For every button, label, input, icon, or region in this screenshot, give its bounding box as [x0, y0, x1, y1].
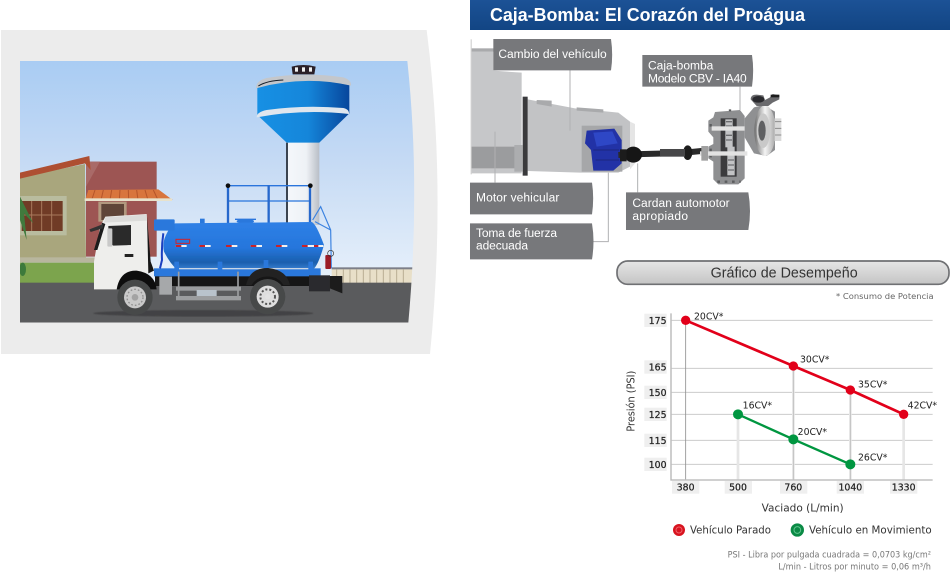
x axis labels: 380 [677, 482, 695, 493]
label: Toma de fuerza adecuada [470, 223, 593, 259]
label: Motor vehicular: Motor vehicular [476, 191, 559, 205]
housing [708, 110, 745, 184]
label: Cardan automotor apropiado [626, 192, 750, 230]
series: vehículo parado: 42CV* [908, 400, 937, 411]
cab [94, 214, 152, 289]
series: vehículo en movimiento [733, 400, 888, 469]
chart heading: Gráfico de Desempeño [711, 266, 858, 282]
label: Caja-bomba: Modelo CBV - IA40 [648, 71, 747, 85]
icon: house [19, 156, 173, 283]
panel: performance chart [617, 261, 949, 573]
chassis [155, 276, 312, 286]
x axis labels: 1330 [892, 482, 916, 493]
label: Cardan automotor apropiado: Cardan automotor [632, 196, 730, 210]
icon: water tower [256, 65, 351, 225]
x axis title: Vaciado (L/min) [762, 502, 844, 515]
notes: unit conversions [728, 550, 931, 573]
notes: unit conversions: L/min - Litros por minuto = 0,06 m³/h [778, 563, 931, 573]
series: vehículo parado: 20CV* [694, 311, 724, 322]
series: vehículo parado: 35CV* [858, 380, 888, 391]
y axis labels: 115 [649, 436, 667, 447]
icon: pump gearbox [700, 94, 781, 184]
y axis labels [644, 314, 667, 471]
note: power consumption: * Consumo de Potencia [836, 291, 934, 301]
tank [163, 222, 324, 269]
y axis title: Presión (PSI) [625, 371, 638, 432]
bolts [711, 109, 741, 182]
railing [228, 186, 310, 219]
legend [673, 523, 932, 537]
label: Cambio del vehículo: Cambio del vehículo [498, 47, 607, 61]
panel background [1, 30, 438, 354]
series: vehículo parado: 30CV* [800, 355, 830, 366]
road [20, 283, 427, 323]
diagram: power train [470, 39, 753, 259]
label: Toma de fuerza adecuada: adecuada [476, 239, 528, 253]
y axis labels: 100 [649, 460, 667, 471]
panel: truck scene [1, 30, 438, 354]
sky [20, 61, 427, 284]
leader lines [495, 70, 740, 242]
label: Caja-bomba [642, 55, 753, 87]
legend: Vehículo Parado [690, 524, 771, 537]
chart heading [617, 261, 949, 284]
icon: cardan shaft [618, 145, 705, 163]
title banner [470, 0, 950, 30]
series: vehículo en movimiento: 20CV* [798, 427, 827, 438]
y axis labels: 150 [649, 388, 667, 399]
x axis labels [672, 481, 917, 494]
transmission [523, 97, 635, 176]
gears [725, 119, 733, 147]
label: Cardan automotor apropiado: apropiado [632, 209, 688, 223]
wheels [117, 271, 157, 289]
series: vehículo en movimiento: 16CV* [743, 400, 772, 411]
label: Cambio del vehículo [493, 39, 612, 70]
side steps and tool box [159, 277, 172, 295]
y axis labels: 175 [649, 316, 667, 327]
title banner: Caja-Bomba: El Corazón del Proágua [490, 5, 806, 25]
series: vehículo en movimiento: 26CV* [858, 453, 888, 464]
label: Motor vehicular [470, 183, 593, 214]
y axis labels: 165 [649, 363, 667, 374]
engine block [471, 39, 522, 174]
label: Caja-bomba: Caja-bomba [648, 58, 714, 72]
series: vehículo parado [681, 311, 937, 419]
icon: power take-off [585, 129, 622, 171]
label: Toma de fuerza adecuada: Toma de fuerza [476, 226, 557, 240]
notes: unit conversions: PSI - Libra por pulgada cuadrada = 0,0703 kg/cm² [728, 550, 931, 560]
x axis labels: 1040 [838, 482, 862, 493]
legend: Vehículo en Movimiento [809, 524, 932, 537]
volute [745, 105, 775, 156]
icon: water truck [89, 183, 342, 315]
illustration: water truck in front of house and water tower [19, 61, 427, 323]
y axis labels: 125 [649, 410, 667, 421]
x axis labels: 760 [784, 482, 802, 493]
reflective stripes [176, 243, 323, 249]
x axis labels: 500 [729, 482, 747, 493]
fence [332, 267, 413, 287]
